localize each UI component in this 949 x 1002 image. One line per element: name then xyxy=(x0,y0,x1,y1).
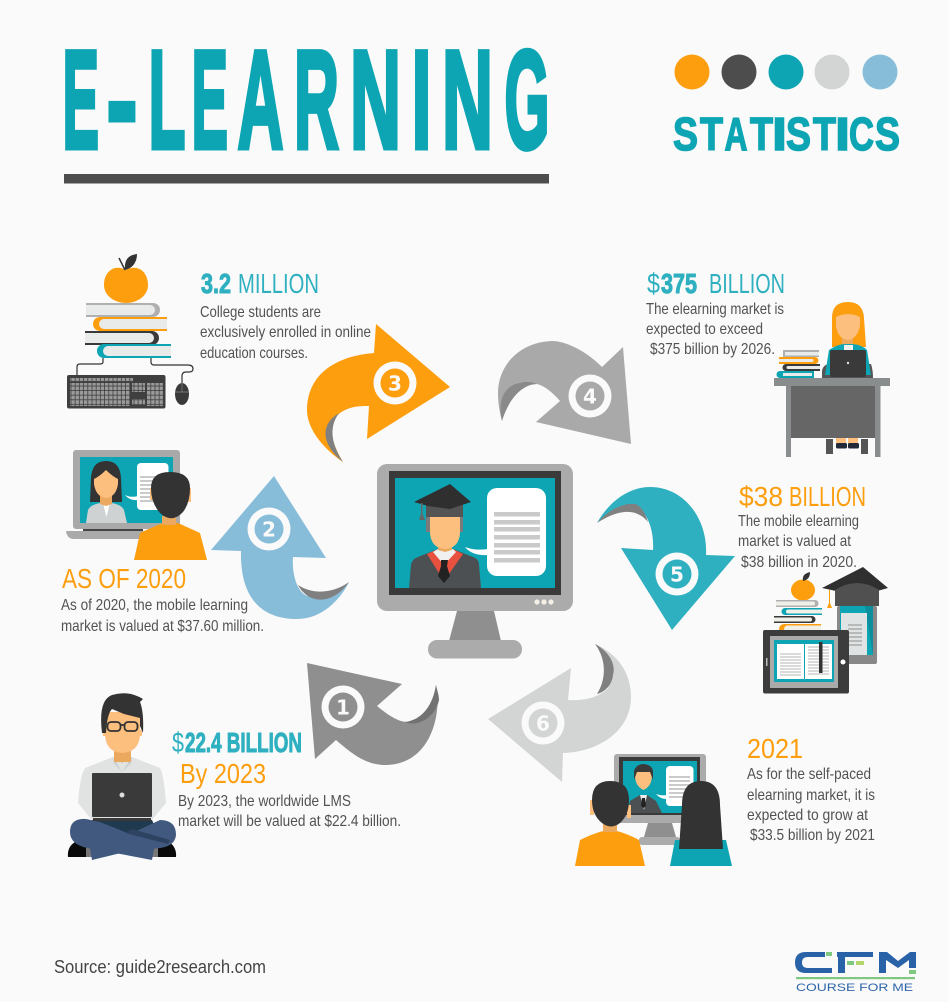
text: self-paced elearning: As for the self-paced xyxy=(747,766,871,783)
subtitle: statistics: T xyxy=(813,108,836,160)
text: mobile elearning: market is valued at xyxy=(738,533,851,550)
text: college students: College students are xyxy=(200,304,321,321)
subtitle: statistics: T xyxy=(700,108,723,160)
text: elearning market: expected to exceed xyxy=(646,321,763,338)
heading: 3.2 million: MILLION xyxy=(238,268,319,299)
title: R xyxy=(294,21,339,178)
icon: apple, books, keyboard and mouse xyxy=(67,254,193,408)
text: self-paced elearning: expected to grow at xyxy=(747,807,868,824)
heading: by 2023: By 2023 xyxy=(180,758,266,789)
text: self-paced elearning: elearning market, it is xyxy=(747,787,875,804)
arrow 2: blue: 2 xyxy=(262,518,276,542)
text: LMS market: By 2023, the worldwide LMS xyxy=(178,793,351,810)
arrow 5: teal: 5 xyxy=(670,562,684,586)
title: A xyxy=(238,21,284,178)
heading: $375 billion: $ xyxy=(647,268,660,299)
title: N xyxy=(350,21,401,178)
arrow 5: teal xyxy=(597,487,735,630)
text: college students: education courses. xyxy=(200,345,308,362)
text: mobile elearning xyxy=(738,513,859,571)
graduate presenter xyxy=(409,484,481,588)
title: E xyxy=(62,21,99,178)
arrow 1: dark grey: 1 xyxy=(336,696,350,720)
text: self-paced elearning xyxy=(747,766,875,844)
central monitor xyxy=(377,464,573,658)
heading: 3.2 million: 3.2 xyxy=(201,268,231,299)
speech bubble xyxy=(465,488,546,576)
title: N xyxy=(442,21,493,178)
heading: $22.4 billion: 22.4 BILLION xyxy=(185,727,302,758)
icon: two students watching a monitor xyxy=(575,754,732,866)
arrow 6: light grey xyxy=(488,644,631,782)
title: L xyxy=(148,21,186,178)
logo: course for me xyxy=(795,952,916,994)
icon: woman on laptop screen with student xyxy=(66,450,207,560)
text: G xyxy=(504,21,550,178)
text: elearning market: The elearning market is xyxy=(646,301,784,318)
text: mobile learning market: As of 2020, the mobile learning xyxy=(61,597,248,614)
icon: books, graduation cap and tablet xyxy=(763,567,888,694)
subtitle: statistics: I xyxy=(835,108,850,160)
arrow 1: dark grey xyxy=(307,663,439,765)
heading: as of 2020: AS OF 2020 xyxy=(62,563,186,594)
arrow 6: light grey: 6 xyxy=(536,712,550,736)
subtitle: statistics: C xyxy=(849,108,874,160)
subtitle: statistics: S xyxy=(786,108,811,160)
title: I xyxy=(412,21,432,178)
subtitle: statistics: T xyxy=(750,108,773,160)
text: mobile elearning: $38 billion in 2020. xyxy=(741,554,857,571)
icon: man with laptop sitting cross-legged xyxy=(68,693,176,860)
subtitle: statistics: I xyxy=(772,108,787,160)
heading: $38 billion: BILLION xyxy=(789,481,866,512)
arrow 4: grey xyxy=(498,341,631,444)
subtitle: statistics: S xyxy=(875,108,900,160)
text: mobile learning market: market is valued at $37.60 million. xyxy=(61,618,264,635)
text: LMS market xyxy=(178,793,401,830)
heading: $38 billion xyxy=(739,481,866,512)
text: self-paced elearning: $33.5 billion by 2021 xyxy=(750,827,875,844)
icon: woman at desk xyxy=(774,302,890,457)
text: mobile elearning: The mobile elearning xyxy=(738,513,859,530)
arrow 3: orange xyxy=(307,324,450,462)
title: E xyxy=(192,21,228,178)
heading: $375 billion: 375 xyxy=(661,268,697,299)
heading: $22.4 billion xyxy=(172,727,302,758)
title: - xyxy=(106,21,138,178)
subtitle: statistics: A xyxy=(724,108,748,160)
arrow 3: orange: 3 xyxy=(388,372,402,396)
heading: $22.4 billion: $ xyxy=(172,727,184,758)
logo: course for me: COURSE FOR ME xyxy=(796,982,913,994)
arrow 4: grey: 4 xyxy=(583,384,597,408)
heading: 2021: 2021 xyxy=(747,733,803,764)
text: college students: exclusively enrolled in online xyxy=(200,324,371,341)
text: elearning market: $375 billion by 2026. xyxy=(650,341,775,358)
heading: $375 billion: BILLION xyxy=(709,268,785,299)
text: LMS market: market will be valued at $22.4 billion. xyxy=(178,813,401,830)
text: college students xyxy=(200,304,371,362)
source line: Source: guide2research.com xyxy=(54,957,266,977)
heading: $38 billion: $38 xyxy=(739,481,783,512)
heading: 3.2 million xyxy=(201,268,319,299)
text: elearning market xyxy=(646,301,784,358)
subtitle: statistics: S xyxy=(673,108,698,160)
palette dots xyxy=(674,54,898,90)
arrow 2: blue xyxy=(211,476,349,619)
heading: $375 billion xyxy=(647,268,785,299)
text: mobile learning market xyxy=(61,597,264,635)
title underline xyxy=(64,174,549,184)
